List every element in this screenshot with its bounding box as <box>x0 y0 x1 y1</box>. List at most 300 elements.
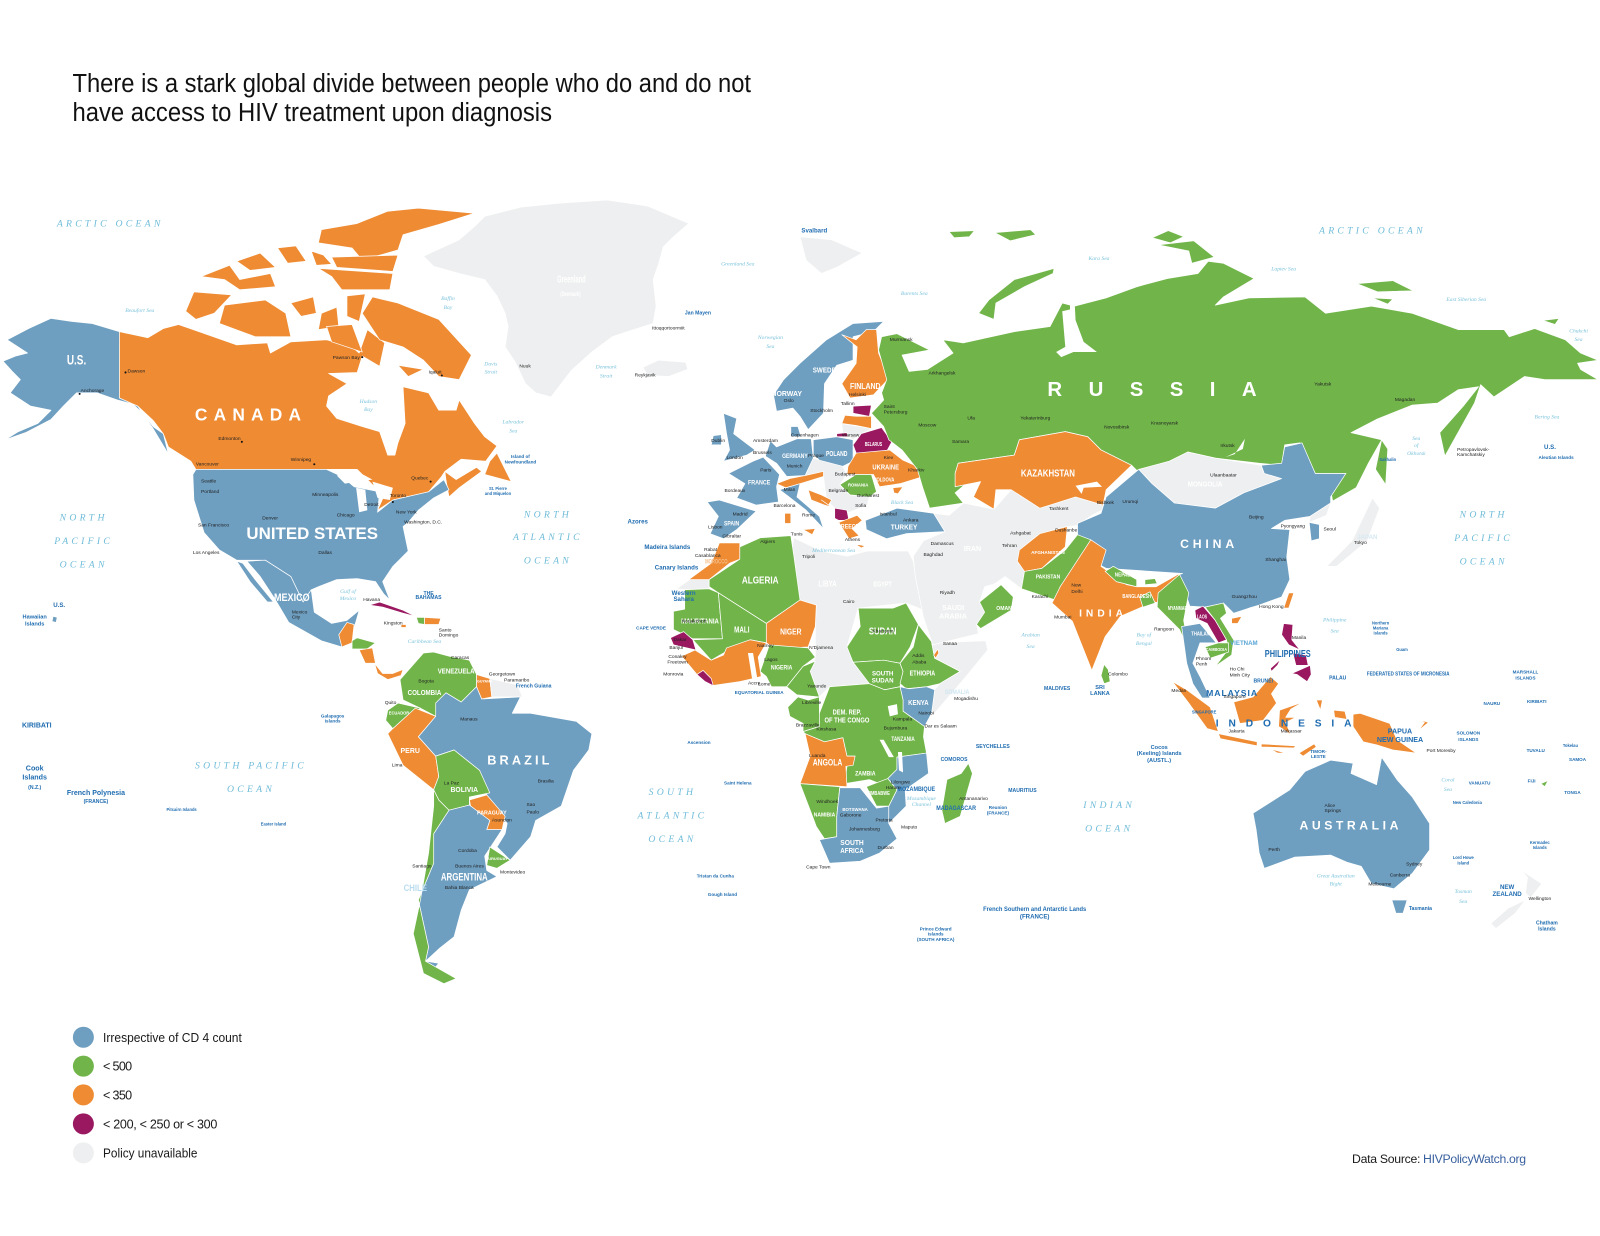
blue place labels off land: (AUSTL.) <box>1147 758 1171 764</box>
ocean and sea labels: Gulf of <box>340 588 357 595</box>
blue place labels off land: Ascension <box>687 740 711 745</box>
North Africa gray <box>791 538 929 697</box>
blue place labels off land: French Southern and Antarctic Lands <box>983 906 1086 913</box>
ocean and sea labels: SOUTH <box>649 787 696 798</box>
city labels and dots: Brazzaville <box>796 723 820 729</box>
Guyana <box>477 674 492 699</box>
Mongolia <box>1139 452 1282 508</box>
Europe <box>707 321 945 548</box>
ocean and sea labels: OCEAN <box>60 559 108 570</box>
city labels and dots: Banjul <box>669 645 683 651</box>
blue place labels off land: NAURU <box>1484 701 1501 706</box>
Bolivia <box>434 750 490 810</box>
city labels and dots: Maputo <box>901 825 918 831</box>
city labels and dots: Wellington <box>1529 896 1552 902</box>
city labels and dots: Addis <box>912 653 925 659</box>
data source note <box>1352 1152 1526 1166</box>
country name labels on land: ALGERIA <box>742 576 779 587</box>
city labels and dots: Detroit <box>364 502 379 508</box>
city labels and dots: Conakry <box>668 654 687 660</box>
Myanmar <box>1157 574 1190 653</box>
blue place labels off land: TONGA <box>1564 790 1581 795</box>
Angola <box>800 734 855 787</box>
Kazakhstan <box>955 432 1132 509</box>
city labels and dots: Cape Town <box>806 864 831 870</box>
country name labels on land: ARGENTINA <box>441 872 488 884</box>
ocean and sea labels: Sea <box>1459 899 1467 905</box>
country name labels on land: SUDAN <box>869 627 896 638</box>
contiguous United States <box>193 469 449 602</box>
city labels and dots: Reykjavik <box>635 373 656 379</box>
Alaska <box>3 318 168 454</box>
city labels and dots: Samara <box>952 439 969 445</box>
Greece <box>839 515 862 539</box>
city labels and dots: Warsaw <box>842 433 860 439</box>
blue place labels off land: Chatham <box>1536 920 1558 926</box>
city labels and dots: Buenos Aires <box>455 863 484 869</box>
city labels and dots: Kingston <box>384 620 403 626</box>
ocean and sea labels: Caribbean Sea <box>408 639 441 645</box>
country name labels on land: UNITED STATES <box>246 525 378 543</box>
city labels and dots: Chicago <box>337 512 355 518</box>
city labels and dots: Sao <box>527 802 535 808</box>
blue place labels off land: MARSHALL <box>1513 669 1539 674</box>
Oman <box>977 585 1013 629</box>
country name labels on land: DEM. REP. <box>833 708 861 716</box>
ocean and sea labels: Great Australian <box>1317 874 1355 880</box>
New Zealand <box>1521 870 1542 898</box>
blue place labels off land: SAMOA <box>1569 757 1587 762</box>
city labels and dots: Algiers <box>760 539 776 545</box>
Zimbabwe <box>866 779 897 806</box>
city labels and dots: Bordeaux <box>724 488 746 494</box>
city labels and dots: Minneapolis <box>312 492 339 498</box>
city labels and dots: Santiago <box>412 863 432 869</box>
city labels and dots: Freetown <box>667 659 688 665</box>
Latvia <box>842 415 871 429</box>
city labels and dots: Melbourne <box>1368 882 1392 888</box>
city labels and dots: Tripoli <box>802 554 815 560</box>
ocean and sea labels: Denmark <box>595 364 617 370</box>
city labels and dots: Havana <box>363 597 380 603</box>
Middle East and Central Asia gray <box>913 490 1106 645</box>
city labels and dots: Edmonton <box>218 436 241 442</box>
country name labels on land: BOTSWANA <box>842 807 869 812</box>
country name labels on land: THAILAND <box>1191 632 1213 638</box>
blue place labels off land: Northern <box>1372 620 1390 625</box>
country name labels on land: MAURITANIA <box>681 617 719 625</box>
legend item: under 350: < 350 <box>103 1088 132 1102</box>
city labels and dots: Georgetown <box>489 671 516 677</box>
city labels and dots: Rome <box>802 512 815 518</box>
Belarus <box>853 428 892 455</box>
city labels and dots: Budapest <box>835 472 856 478</box>
country name labels on land: CANADA <box>195 404 302 424</box>
blue place labels off land: SEYCHELLES <box>976 744 1010 750</box>
blue place labels off land: Mariana <box>1373 626 1389 631</box>
blue place labels off land: CAPE VERDE <box>636 626 666 631</box>
legend item: irrespective of CD4 count: Irrespective of CD 4 count <box>103 1031 242 1045</box>
ocean and sea labels: Channel <box>912 802 931 808</box>
Nigeria <box>760 645 815 687</box>
city labels and dots: Krasnoyarsk <box>1151 420 1179 426</box>
blue place labels off land: VANUATU <box>1469 781 1491 786</box>
city labels and dots: Bujumbura <box>884 726 908 732</box>
Greenland, Iceland and Svalbard: policy unavailable <box>423 200 862 397</box>
city labels and dots: Brasilia <box>538 779 554 785</box>
Mexico <box>237 560 359 647</box>
city labels and dots: Winnipeg <box>291 457 311 463</box>
ocean and sea labels: Sea <box>766 344 775 350</box>
city labels and dots: Paris <box>760 467 772 473</box>
blue place labels off land: Saint Helena <box>724 781 752 786</box>
city labels and dots: Sydney <box>1406 861 1423 867</box>
country name labels on land: CAMBODIA <box>1206 647 1228 652</box>
country name labels on land: SUDAN <box>872 678 894 685</box>
city labels and dots: Lisbon <box>708 525 723 531</box>
Sudan <box>847 603 918 663</box>
country name labels on land: JAPAN <box>1357 534 1377 541</box>
country name labels on land: ECUADOR <box>389 710 409 715</box>
blue place labels off land: PAPUA <box>1388 728 1412 736</box>
country name labels on land: ANGOLA <box>813 757 843 767</box>
city labels and dots: Durban <box>878 845 894 851</box>
Norway and Sweden <box>773 321 884 430</box>
city labels and dots: Tashkent <box>1049 506 1069 512</box>
city labels and dots: La Paz <box>444 781 460 787</box>
Argentina <box>418 805 502 969</box>
city labels and dots: Montevideo <box>500 869 525 875</box>
city labels and dots: Washington, D.C. <box>404 519 442 525</box>
city labels and dots: Kampala <box>893 716 912 722</box>
city labels and dots: Perth <box>1268 847 1280 853</box>
city labels and dots: Dawson <box>128 368 145 374</box>
city labels and dots: Johannesburg <box>849 827 880 833</box>
city labels and dots: Barcelona <box>773 503 796 509</box>
city labels and dots: Luanda <box>809 753 826 759</box>
Suriname and French Guiana <box>490 679 522 697</box>
Korea and Japan <box>1309 522 1319 541</box>
city labels and dots: Kamchatskiy <box>1457 452 1485 458</box>
blue place labels off land: Lord Howe <box>1453 855 1475 860</box>
city labels and dots: Dallas <box>318 550 332 556</box>
country name labels on land: Greenland <box>557 275 586 286</box>
ocean and sea labels: Barents Sea <box>901 291 928 297</box>
country name labels on land: VENEZUELA <box>438 667 474 675</box>
ocean and sea labels: Bay of <box>1137 632 1153 639</box>
ocean and sea labels: Bight <box>1330 882 1342 888</box>
ocean and sea labels: Bengal <box>1136 641 1152 647</box>
blue place labels off land: (Keeling) Islands <box>1137 751 1182 757</box>
country name labels on land: RUSSIA <box>1047 379 1257 401</box>
legend item: under 200, 250 or 300: < 200, < 250 or < 300 <box>103 1117 217 1131</box>
country name labels on land: CHINA <box>1180 537 1234 551</box>
city labels and dots: Karachi <box>1032 594 1048 600</box>
blue place labels off land: Guam <box>1396 647 1408 652</box>
ocean and sea labels: PACIFIC <box>53 536 113 547</box>
city labels and dots: Santo <box>439 628 452 634</box>
city labels and dots: Belgrade <box>829 488 848 494</box>
city labels and dots: Phnom <box>1196 656 1211 662</box>
Senegal <box>670 632 696 650</box>
city labels and dots: Seattle <box>201 479 216 485</box>
country name labels on land: PARAGUAY <box>477 810 507 816</box>
city labels and dots: Tehran <box>1002 543 1017 549</box>
city labels and dots: Cordoba <box>458 848 477 854</box>
city labels and dots: Bahia Blanca <box>445 885 474 891</box>
city labels and dots: Penh <box>1196 661 1208 667</box>
blue place labels off land: PALAU <box>1329 676 1347 682</box>
ocean and sea labels: OCEAN <box>1460 556 1508 567</box>
city labels and dots: Ababa <box>912 659 927 665</box>
blue place labels off land: KIRIBATI <box>1527 699 1546 704</box>
title <box>72 70 751 127</box>
ocean and sea labels: Bay <box>444 305 453 311</box>
ocean and sea labels: Black Sea <box>891 500 913 506</box>
country name labels on land: SOUTH <box>840 838 864 847</box>
city labels and dots: Munich <box>787 463 803 469</box>
ocean and sea labels: Chukchi <box>1569 329 1588 335</box>
city labels and dots: Nuuk <box>519 363 531 369</box>
blue place labels off land: Islands <box>325 718 341 723</box>
blue place labels off land: St. Pierre <box>489 486 508 491</box>
blue place labels off land: Galapagos <box>321 713 345 718</box>
Vietnam <box>1205 603 1234 666</box>
ocean and sea labels: ARCTIC OCEAN <box>56 219 164 230</box>
country name labels on land: TURKEY <box>891 523 917 532</box>
blue place labels off land: Sahara <box>673 596 694 603</box>
ocean and sea labels: Strait <box>600 374 613 380</box>
city labels and dots: Nouakchott <box>682 618 707 624</box>
Philippines <box>1270 623 1311 682</box>
country name labels on land: ETHIOPIA <box>910 669 935 677</box>
Peru <box>388 708 439 790</box>
city labels and dots: Bucharest <box>857 493 880 499</box>
country name labels on land: NIGERIA <box>771 664 793 671</box>
blue place labels off land: U.S. <box>1544 444 1556 451</box>
blue place labels off land: Jan Mayen <box>685 310 711 316</box>
ocean and sea labels: Hudson <box>359 399 377 405</box>
ocean and sea labels: Norwegian <box>757 335 783 341</box>
blue place labels off land: Tristan da Cunha <box>697 874 734 879</box>
blue place labels off land: SINGAPORE <box>1192 709 1217 714</box>
ocean and sea labels: Okhotsk <box>1407 451 1426 457</box>
Laos <box>1195 606 1227 643</box>
city labels and dots: Minh City <box>1230 673 1250 679</box>
blue place labels off land <box>22 228 1587 942</box>
blue place labels off land: ISLANDS <box>1458 737 1478 742</box>
Niger <box>766 600 816 648</box>
city labels and dots: Yekaterinburg <box>1020 415 1051 421</box>
city labels and dots: Alice <box>1324 803 1335 809</box>
Germany and Benelux <box>765 439 813 477</box>
blue place labels off land: Islands <box>1538 927 1556 933</box>
blue place labels off land: LANKA <box>1090 691 1110 697</box>
city labels and dots: Rabat <box>704 547 718 553</box>
Austria and Switzerland <box>777 471 823 488</box>
city labels and dots: Lilongwe <box>891 780 910 786</box>
blue place labels off land: Islands <box>1533 845 1548 850</box>
city labels and dots: Rangoon <box>1154 627 1174 633</box>
Canada islands <box>186 208 511 497</box>
country name labels on land: AUSTRALIA <box>1299 819 1399 833</box>
city labels and dots: Lome <box>758 682 771 688</box>
city labels and dots: Makassar <box>1281 729 1302 735</box>
ocean and sea labels: Bering Sea <box>1535 414 1559 420</box>
country name labels on land: GUYANA <box>477 680 493 684</box>
city labels and dots: Moscow <box>918 423 937 429</box>
blue place labels off land: MALAYSIA <box>1206 688 1258 698</box>
Cambodia <box>1205 643 1229 658</box>
blue place labels off land: SRI <box>1095 685 1105 691</box>
country name labels on land: SOUTH <box>872 670 893 677</box>
Russia <box>871 261 1598 508</box>
blue place labels off land: Aleutian Islands <box>1539 455 1574 460</box>
legend item: under 200, 250 or 300 <box>73 1113 217 1134</box>
city labels and dots: Brussels <box>753 450 772 456</box>
country name labels on land: SOMALIA <box>945 689 970 696</box>
Great Lakes <box>337 471 393 512</box>
ocean and sea labels: Mozambique <box>906 796 936 802</box>
country name labels on land: SPAIN <box>724 521 739 528</box>
ocean and sea labels: Sea <box>509 429 518 435</box>
blue place labels off land: NEW GUINEA <box>1377 736 1423 744</box>
Tasmania <box>1392 900 1407 913</box>
city labels and dots: Pretoria <box>876 817 893 823</box>
city labels and dots: Amsterdam <box>753 438 778 444</box>
ocean and sea labels: Kara Sea <box>1087 256 1110 262</box>
country name labels on land: ZIMBABWE <box>867 791 890 797</box>
legend item: under 500 <box>73 1056 132 1077</box>
city labels and dots: New York <box>396 509 417 515</box>
city labels and dots: Paramaribo <box>504 678 530 684</box>
city labels and dots: Madrid <box>733 511 748 517</box>
city labels and dots: Novosibirsk <box>1104 425 1130 431</box>
ocean and sea labels: INDIAN <box>1082 800 1135 811</box>
ocean and sea labels: Sea <box>1444 787 1452 793</box>
Brazil <box>418 687 592 860</box>
city labels and dots: Mumbai <box>1054 614 1071 620</box>
Algeria and Tunisia <box>709 536 800 623</box>
city labels and dots: Helsinki <box>849 392 866 398</box>
city labels and dots: Yaounde <box>807 684 827 690</box>
city labels and dots: Antananarivo <box>959 796 988 802</box>
city labels and dots: Gaborone <box>840 812 862 818</box>
country name labels on land: ARABIA <box>939 612 967 620</box>
blue place labels off land: Cook <box>26 764 44 772</box>
blue place labels off land: Island <box>1457 860 1470 865</box>
blue place labels off land: Svalbard <box>801 228 827 235</box>
ocean and sea labels: Sea <box>1331 629 1339 635</box>
blue place labels off land: and Miquelon <box>485 491 512 496</box>
city labels and dots: Canberra <box>1390 873 1410 879</box>
city labels and dots: Windhoek <box>816 799 839 805</box>
ocean and sea labels: East Siberian Sea <box>1445 297 1486 303</box>
Gabon and Congo <box>788 697 819 732</box>
blue place labels off land: Canary Islands <box>655 564 699 571</box>
city labels and dots: Port Moresby <box>1427 748 1456 754</box>
city labels and dots: Murmansk <box>890 337 913 343</box>
country name labels on land: NORWAY <box>771 389 802 398</box>
country name labels on land: MEXICO <box>274 592 310 604</box>
Fiji and Hawaii <box>1541 781 1548 787</box>
Pakistan <box>1021 535 1091 600</box>
country name labels on land: BANGLADESH <box>1122 594 1151 600</box>
city labels and dots: Denver <box>262 515 278 521</box>
country name labels on land: MOROCCO <box>705 558 728 565</box>
DRC, Uganda, Tanzania, Zambia <box>803 684 927 787</box>
city labels and dots: Dushanbe <box>1055 528 1078 534</box>
data source note: HIVPolicyWatch.org <box>1423 1152 1526 1166</box>
city labels and dots: Gibraltar <box>722 534 742 540</box>
country name labels on land: ZAMBIA <box>855 770 876 777</box>
West Africa <box>682 640 766 686</box>
country name labels on land: LAOS <box>1197 614 1208 620</box>
blue place labels off land: Newfoundland <box>505 459 536 464</box>
country name labels on land: LIBYA <box>818 580 837 589</box>
city labels and dots: New <box>1071 583 1082 589</box>
country name labels on land: GERMANY <box>782 453 808 460</box>
ocean and sea labels: Laptev Sea <box>1270 266 1296 272</box>
country name labels on land: SAUDI <box>942 604 964 612</box>
Botswana and South Africa <box>819 788 897 863</box>
blue place labels off land: VIETNAM <box>1230 640 1258 647</box>
ocean and sea labels: OCEAN <box>227 784 275 795</box>
city labels and dots: Baghdad <box>923 552 943 558</box>
Mozambique and Malawi <box>888 753 929 823</box>
Liberia <box>697 670 713 686</box>
legend item: policy unavailable <box>73 1142 197 1163</box>
ocean and sea labels: Beaufort Sea <box>125 307 155 314</box>
city labels and dots: Libreville <box>802 700 822 706</box>
India <box>1052 540 1180 670</box>
country name labels on land: GREECE <box>837 524 860 531</box>
blue place labels off land: Prince Edward <box>920 927 952 932</box>
city labels and dots: Hong Kong <box>1259 604 1284 610</box>
blue place labels off land: ZEALAND <box>1493 891 1522 898</box>
city labels and dots: Accra <box>748 681 761 687</box>
blue place labels off land: (N.Z.) <box>28 785 42 791</box>
country name labels on land: BRAZIL <box>487 752 550 767</box>
blue place labels off land: MAURITIUS <box>1008 788 1037 794</box>
country name labels on land: SWEDEN <box>813 365 840 374</box>
city labels and dots: Petersburg <box>884 409 908 415</box>
Mali <box>693 593 766 660</box>
blue place labels off land: Islands <box>1374 631 1388 636</box>
city labels and dots: Ittoqqortoormiit <box>652 326 685 332</box>
city labels and dots: Stockholm <box>810 408 833 414</box>
title: There is a stark global divide between people who do and do not <box>72 70 751 98</box>
UK and Ireland <box>723 413 755 461</box>
city labels and dots: Ufa <box>967 415 975 421</box>
Mauritania <box>673 589 722 639</box>
city labels and dots: Khartoum <box>872 629 894 635</box>
city labels and dots: Lagos <box>764 657 778 663</box>
Ecuador <box>386 703 420 729</box>
blue place labels off land: ISLANDS <box>1515 676 1536 681</box>
blue place labels off land: French Guiana <box>516 684 552 690</box>
ocean and sea labels: NORTH <box>59 512 108 523</box>
blue place labels off land: Pitcairn Islands <box>167 807 197 812</box>
city labels and dots: Manaus <box>460 716 478 722</box>
ocean and sea labels: Mediterranean Sea <box>811 548 855 554</box>
blue place labels off land: PHILIPPINES <box>1265 649 1311 660</box>
Ukraine and Moldova <box>847 450 927 487</box>
ocean and sea labels: Baffin <box>441 295 455 302</box>
ocean and sea labels: Coral <box>1441 778 1455 784</box>
city labels and dots: Magadan <box>1395 397 1416 403</box>
blue place labels off land: COMOROS <box>941 757 968 763</box>
